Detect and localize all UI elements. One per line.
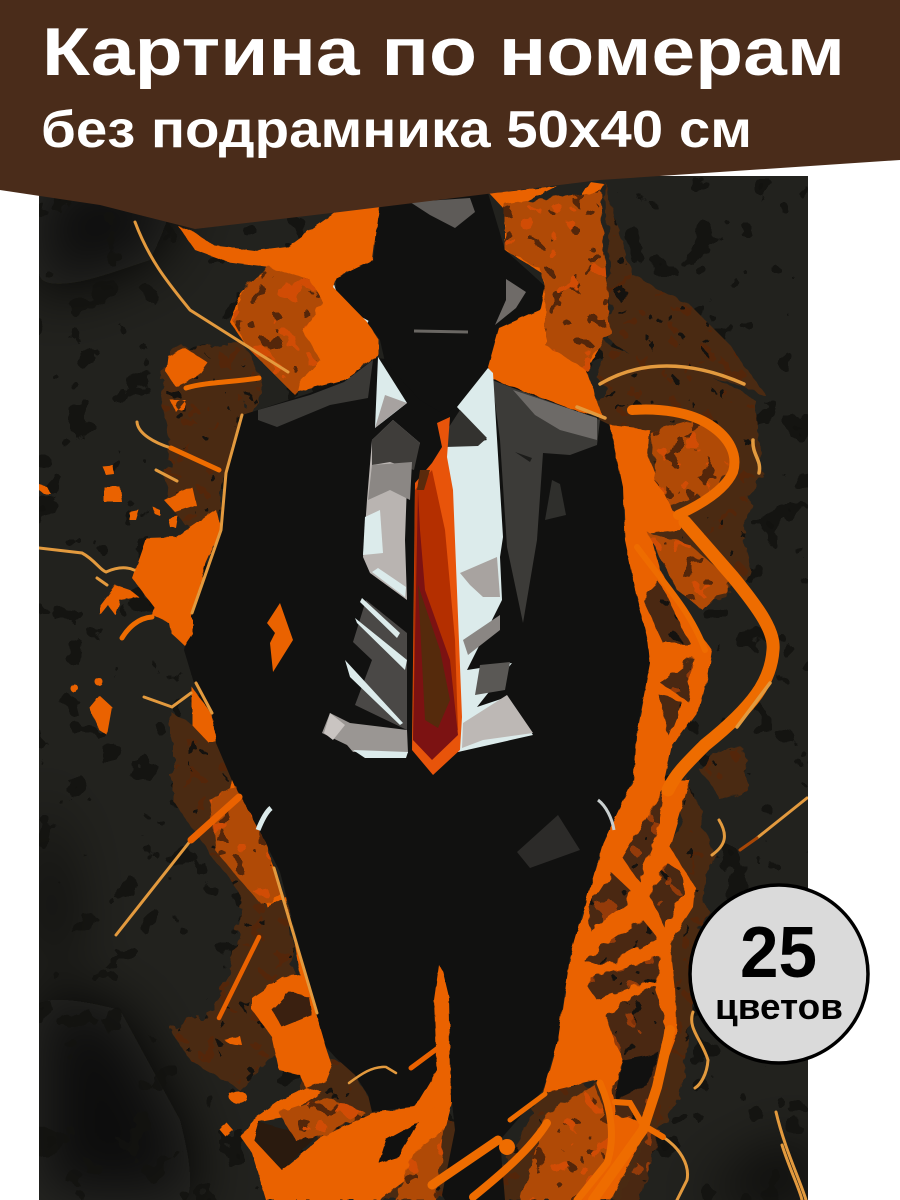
left flame around hat [178, 203, 380, 393]
man silhouette [184, 193, 650, 1200]
left splash arms [100, 585, 139, 615]
right lapel [492, 380, 600, 623]
tie [412, 417, 462, 775]
body [184, 358, 650, 1200]
badge number: 25 [740, 913, 817, 993]
small left drops [39, 400, 247, 1137]
badge: 25 colours [690, 885, 868, 1063]
orange flames [39, 182, 712, 1200]
left big splash [132, 510, 221, 645]
right shirt [445, 368, 533, 752]
header banner [0, 0, 900, 229]
spike over trousers [414, 965, 452, 1107]
hat highlights [495, 279, 526, 325]
left shirt with shading [322, 357, 420, 758]
dark gaps in flames [254, 992, 660, 1170]
right cuff [598, 800, 614, 830]
right main band [610, 425, 712, 790]
left orange arms [122, 378, 259, 638]
right lower lines [757, 798, 807, 838]
left cuff [258, 808, 271, 830]
body edge flame [225, 780, 332, 1088]
title: Картина по номерам [42, 14, 845, 90]
bottom big orange [241, 1088, 452, 1200]
inner strand [637, 547, 705, 650]
stream holes [583, 583, 693, 1200]
ring around the mottled patch [632, 410, 734, 515]
splatter blob bottom left [89, 695, 112, 735]
ribbons and thin lines [39, 222, 807, 1200]
left shirt lower stripes [322, 598, 408, 758]
brown flame shadows [160, 182, 765, 1200]
mottled burn texture in flames [210, 190, 733, 1200]
tan accents [577, 366, 770, 727]
badge label: цветов [715, 986, 843, 1027]
right big ribbon [668, 522, 773, 790]
right flame around hat [488, 186, 603, 418]
left shoulder shade [258, 360, 373, 427]
right pocket shade [517, 815, 580, 868]
bright streak in right flame [581, 182, 604, 196]
hat [336, 194, 545, 369]
painting background [39, 176, 808, 1200]
painting: man in suit with orange flames [39, 176, 808, 1200]
body edge tan line left [192, 415, 242, 713]
hat band [414, 331, 468, 332]
splatter blob upper left [166, 348, 207, 387]
left lower flame edge [192, 687, 216, 742]
hat top highlight [410, 198, 475, 228]
pocket orange highlight [267, 603, 293, 672]
subtitle: без подрамника 50х40 см [41, 101, 752, 159]
lower right stream [543, 780, 695, 1200]
left tan lines [39, 422, 191, 707]
right shirt folds [445, 410, 533, 748]
hat shine edge [333, 285, 368, 322]
bottom streaks [432, 1140, 498, 1185]
